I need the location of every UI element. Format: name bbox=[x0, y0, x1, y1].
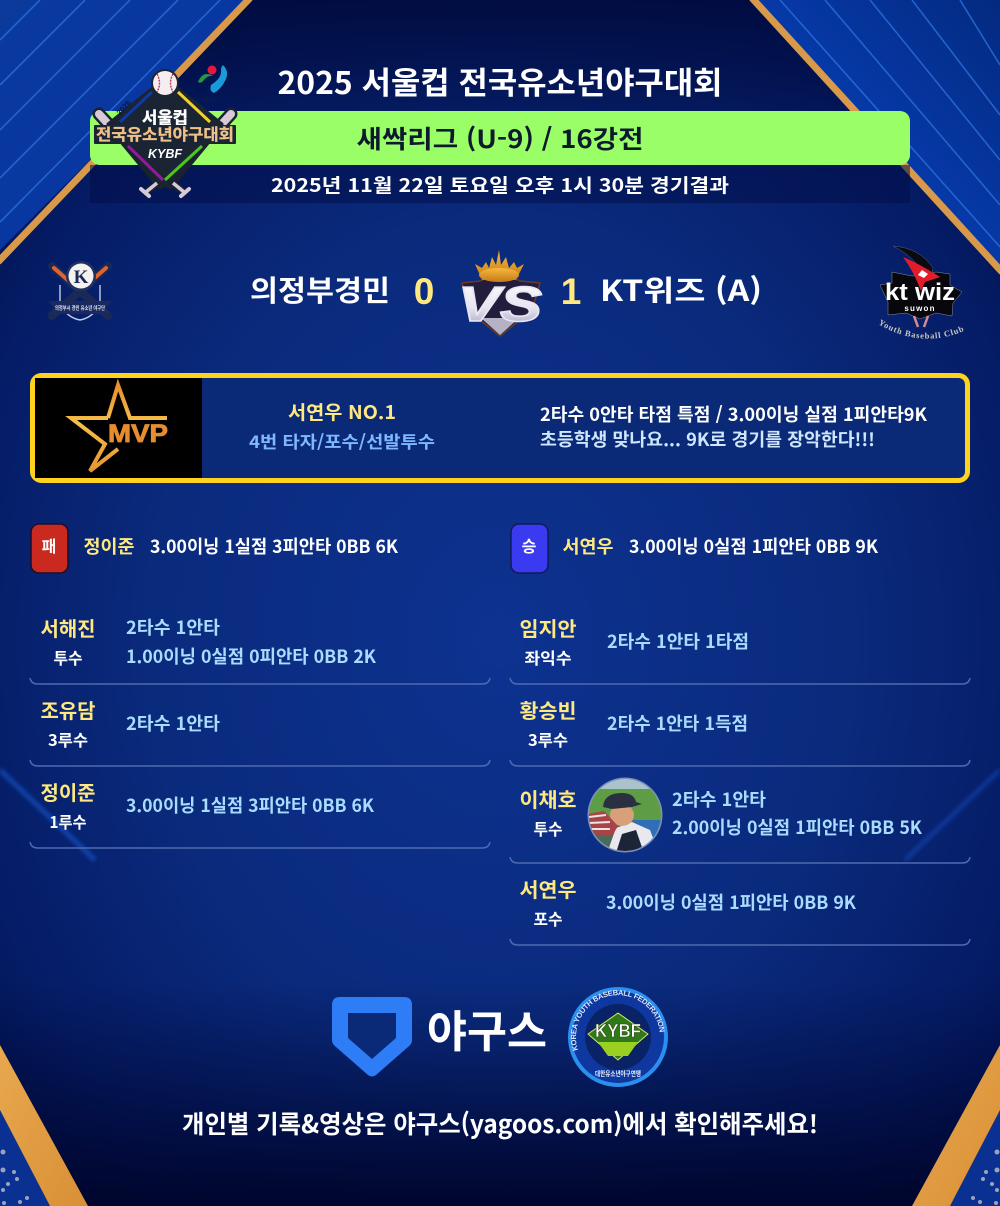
panel: home team player records bbox=[30, 613, 490, 848]
row: 서연우: 3.00이닝 0실점 1피안타 0BB 9K bbox=[606, 889, 857, 915]
logo: Seoul Cup tournament badge bbox=[94, 69, 236, 196]
badge: win bbox=[511, 524, 548, 573]
row: 서해진: 2타수 1안타 bbox=[126, 614, 220, 640]
logo: Seoul Cup tournament badge: KYBF bbox=[148, 147, 182, 161]
row: 조유담 bbox=[30, 695, 490, 766]
subtitle bar: league and round bbox=[90, 111, 910, 165]
icon: kt wiz logo: Youth Baseball Club bbox=[879, 319, 964, 339]
row: 조유담: 2타수 1안타 bbox=[126, 710, 220, 736]
row: 이채호: 2타수 1안타 bbox=[672, 786, 766, 812]
row: 이채호: 투수 bbox=[534, 816, 563, 840]
panel: winning pitcher bbox=[511, 524, 879, 573]
logo: KYBF federation: KYBF bbox=[595, 1021, 641, 1041]
row: 이채호 bbox=[510, 775, 970, 863]
title: 2025 서울컵 전국유소년야구대회 bbox=[278, 58, 722, 103]
date strip bbox=[90, 165, 910, 203]
icon: Seoul logo bbox=[198, 65, 227, 104]
player photo bbox=[588, 778, 662, 852]
logo: Seoul Cup tournament badge: 서울컵 bbox=[142, 104, 188, 129]
MVP player name: 서연우 NO.1 bbox=[288, 398, 396, 425]
row: 황승빈: 3루수 bbox=[528, 727, 568, 751]
icon: Seoul logo: SEOUL bbox=[202, 98, 223, 104]
row: 정이준: 정이준 bbox=[40, 777, 96, 806]
row: 황승빈 bbox=[510, 695, 970, 766]
footer message: 개인별 기록&영상은 야구스(yagoos.com)에서 확인해주세요! bbox=[182, 1105, 818, 1141]
panel: MVP bbox=[32, 376, 968, 480]
pitcher stats: 3.00이닝 1실점 3피안타 0BB 6K bbox=[150, 533, 399, 559]
row: 이채호: 2.00이닝 0실점 1피안타 0BB 5K bbox=[672, 814, 923, 840]
row: 임지안: 임지안 bbox=[520, 613, 576, 642]
home team name: 의정부경민 bbox=[250, 268, 390, 310]
row: 임지안: 2타수 1안타 1타점 bbox=[607, 628, 749, 654]
logo: Yagoos home plate bbox=[332, 997, 412, 1076]
icon: kt wiz logo: kt wiz bbox=[885, 279, 955, 306]
badge: win: 승 bbox=[522, 533, 537, 557]
row: 이채호: 이채호 bbox=[520, 784, 576, 813]
logo: Seoul Cup tournament badge: 전국유소년야구대회 bbox=[96, 121, 234, 145]
row: 정이준: 3.00이닝 1실점 3피안타 0BB 6K bbox=[126, 792, 375, 818]
MVP comment bbox=[540, 401, 928, 452]
row: 서해진 bbox=[30, 613, 490, 684]
badge: loss: 패 bbox=[42, 533, 56, 557]
panel: losing pitcher bbox=[31, 524, 399, 573]
icon: kt wiz logo bbox=[879, 246, 964, 339]
logo: KYBF federation: KOREA YOUTH BASEBALL FEDERATION bbox=[570, 990, 665, 1051]
icon: home team logo: 의정부시 경민 유소년 야구단 bbox=[55, 304, 105, 312]
brand name: 야구스 bbox=[427, 996, 547, 1060]
MVP comment: 초등학생 맞나요... 9K로 경기를 장악한다!!! bbox=[540, 426, 875, 452]
pitcher name: 서연우 bbox=[562, 533, 614, 559]
row: 조유담: 조유담 bbox=[40, 695, 96, 724]
row: 정이준: 1루수 bbox=[50, 809, 87, 833]
row: 서해진: 1.00이닝 0실점 0피안타 0BB 2K bbox=[126, 643, 377, 669]
panel: away team player records bbox=[510, 613, 970, 945]
row: 황승빈: 황승빈 bbox=[520, 695, 576, 724]
row: 서연우: 서연우 bbox=[520, 874, 576, 903]
MVP comment: 2타수 0안타 타점 특점 / 3.00이닝 실점 1피안타9K bbox=[540, 401, 928, 427]
row: 임지안 bbox=[510, 613, 970, 684]
row: 정이준 bbox=[30, 777, 490, 848]
row: 조유담: 3루수 bbox=[48, 727, 88, 751]
icon: MVP star: MVP bbox=[108, 420, 168, 448]
row: 서해진: 서해진 bbox=[40, 613, 96, 642]
row: 황승빈: 2타수 1안타 1득점 bbox=[607, 710, 748, 736]
pitcher name: 정이준 bbox=[84, 533, 134, 559]
badge: loss bbox=[31, 524, 68, 573]
icon: MVP star bbox=[35, 378, 202, 478]
logo: Seoul Cup tournament badge: 2025 bbox=[115, 98, 133, 117]
icon: VS crown shield: VS bbox=[458, 278, 542, 332]
MVP player role: 4번 타자/포수/선발투수 bbox=[249, 428, 435, 453]
home score: 0 bbox=[414, 271, 434, 312]
logo: KYBF federation bbox=[568, 987, 668, 1087]
away score: 1 bbox=[561, 271, 581, 312]
icon: VS crown shield bbox=[458, 250, 542, 336]
row: 임지안: 좌익수 bbox=[524, 645, 572, 669]
row: 서해진: 투수 bbox=[54, 645, 83, 669]
icon: home team logo bbox=[48, 261, 112, 320]
date strip: 2025년 11월 22일 토요일 오후 1시 30분 경기결과 bbox=[271, 171, 729, 198]
icon: home team logo: K bbox=[74, 267, 89, 288]
icon: kt wiz logo: suwon bbox=[904, 304, 936, 313]
pitcher stats: 3.00이닝 0실점 1피안타 0BB 9K bbox=[629, 533, 879, 559]
row: 서연우: 포수 bbox=[534, 906, 563, 930]
row: 서연우 bbox=[510, 874, 970, 945]
away team name: KT위즈 (A) bbox=[600, 268, 762, 310]
logo: KYBF federation: 대한유소년야구연맹 bbox=[595, 1069, 641, 1079]
subtitle bar: league and round: 새싹리그 (U-9) / 16강전 bbox=[356, 120, 644, 156]
